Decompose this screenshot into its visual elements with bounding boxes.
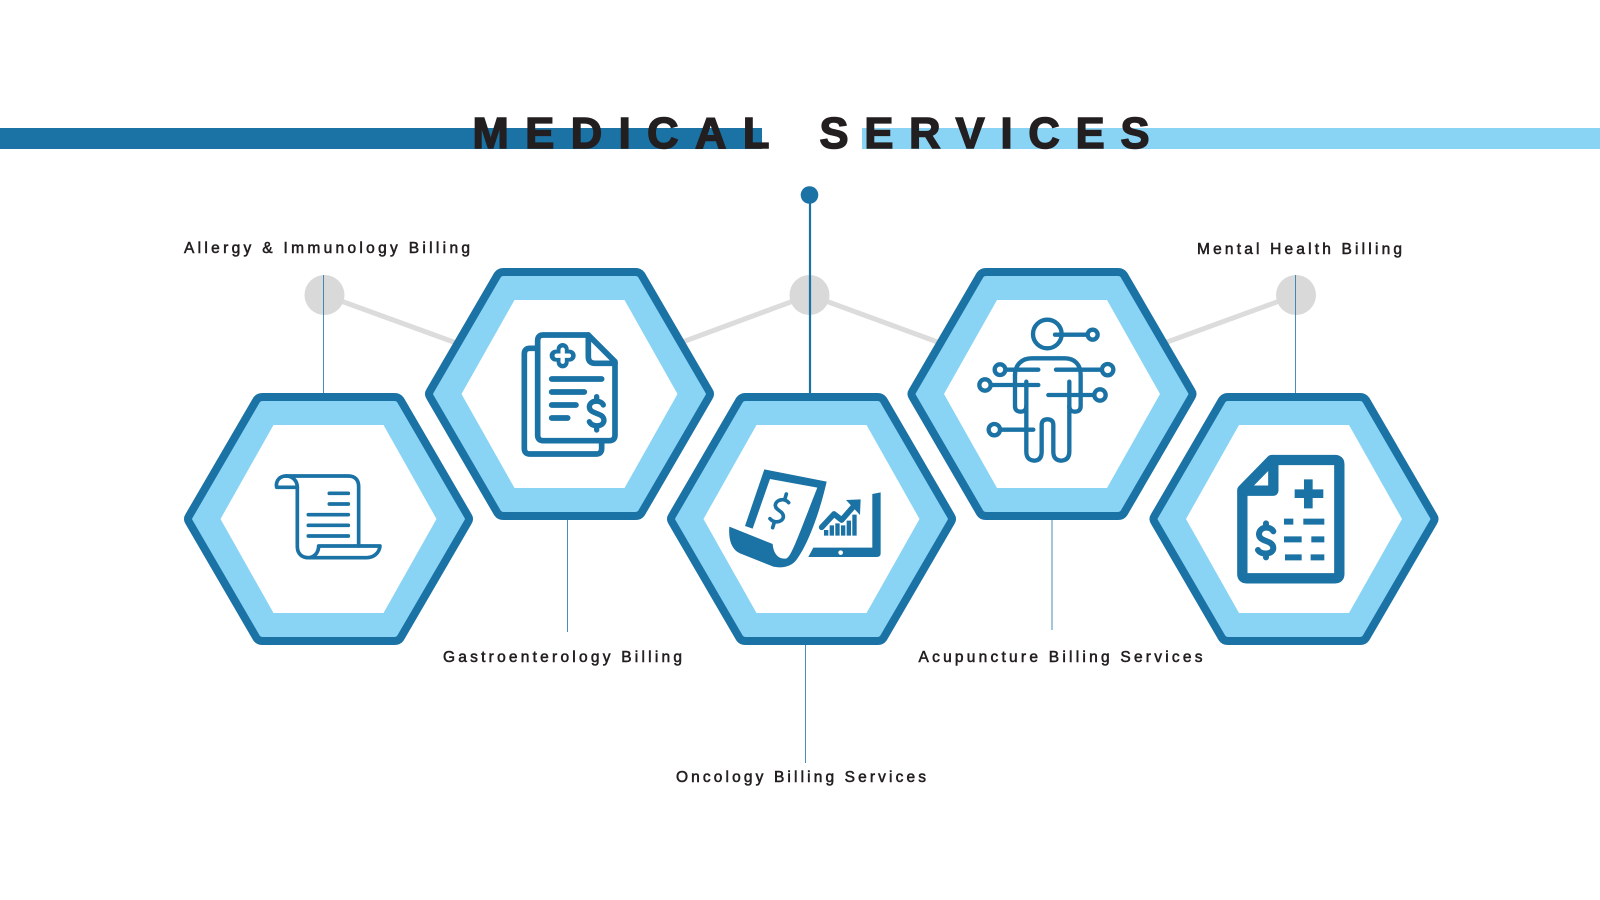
label: oncology: Oncology Billing Services [676,769,926,786]
leader line: mental health [1294,275,1296,394]
title: SERVICES [820,110,1150,158]
label: allergy: Allergy & Immunology Billing [184,240,470,257]
hexagon: allergy [188,397,469,641]
centre pin [801,186,818,394]
icon: body with nodes [979,320,1113,461]
header bar: light right [862,128,1600,149]
title [472,110,1150,158]
hexagon: oncology [671,397,952,641]
header bar: dark left [0,128,762,149]
title: MEDICAL [472,110,770,158]
leader line: gastroenterology [566,515,568,632]
leader line: oncology [804,640,806,763]
icon: medical invoice pages [524,335,615,454]
hexagon: mental health [1154,397,1434,641]
hexagon: gastroenterology [429,272,710,516]
node: right [1276,275,1316,315]
label: mental health: Mental Health Billing [1197,241,1402,258]
connector network [304,275,1316,384]
node: centre [790,275,830,315]
icon: bill and growth chart [729,469,881,567]
label: gastroenterology: Gastroenterology Billing [443,649,682,666]
icon: medical bill [1242,460,1339,578]
leader line: acupuncture [1051,515,1053,630]
node: left [304,275,344,315]
icon: scroll [276,476,380,558]
leader line: allergy [322,275,324,394]
hexagon: acupuncture [912,272,1192,516]
label: acupuncture: Acupuncture Billing Services [918,649,1203,666]
